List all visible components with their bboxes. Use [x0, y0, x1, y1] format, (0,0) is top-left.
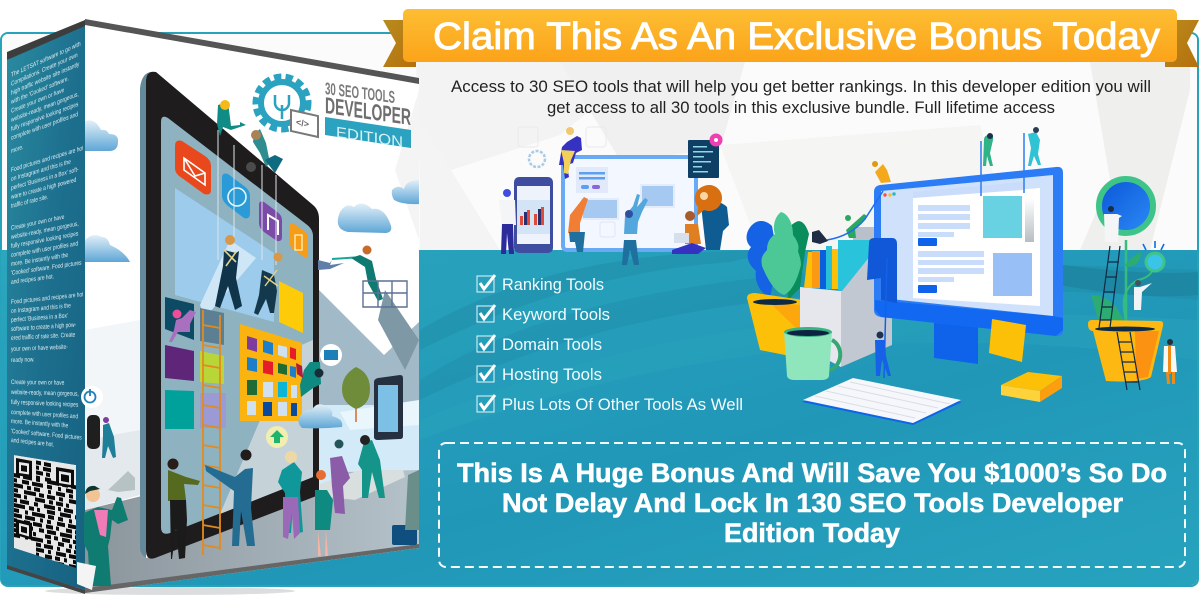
side panel small copy: ware to create a high powered	[10, 177, 76, 201]
product box: logo: </>	[296, 117, 309, 129]
figure: man in blue suit	[205, 450, 255, 546]
tablet app icons	[175, 141, 308, 258]
side panel small copy: perfect 'Business in a Box' soft-	[11, 167, 79, 192]
illustration: figure with pole	[875, 258, 891, 378]
illustration: monitor climbers	[812, 127, 1041, 244]
item: ranking tools: Ranking Tools	[502, 275, 604, 294]
illustration: flower ladders and scientists	[1099, 206, 1177, 390]
side panel small copy: on Instagram and this is the	[11, 159, 71, 183]
figure: man in green reaching ladder	[168, 458, 200, 559]
product box: logo: DEVELOPER	[325, 92, 411, 130]
product box: logo: 30 SEO TOOLS	[325, 79, 395, 107]
bookshelf	[240, 324, 302, 421]
side panel small copy: complete with user profiles and	[11, 241, 78, 259]
item: other tools: Plus Lots Of Other Tools As Well	[502, 395, 743, 414]
side panel small copy: Food pictures and recipes are hot	[11, 145, 84, 174]
speech bubble: book	[320, 344, 342, 366]
figure: woman with telescope on platform	[318, 246, 407, 307]
illustration: right potted flower	[1088, 179, 1164, 382]
tree	[342, 367, 370, 422]
side panel small copy: ered traffic of rate site. Create	[11, 332, 75, 342]
side panel small copy: website-ready, mean gorgeous,	[10, 389, 79, 398]
side panel small copy: with the 'Cooked' software.	[10, 76, 69, 107]
speech bubble: power	[81, 386, 103, 408]
speech bubble: up arrow	[266, 426, 288, 448]
product box: logo: EDITION	[336, 124, 403, 151]
illustration: web team with phone and board	[499, 127, 729, 265]
intro text: Access to 30 SEO tools that will help you get better rankings. In this developer edition you will	[451, 78, 1151, 96]
callout: dashed bonus box	[439, 443, 1185, 567]
climbers on tablet	[169, 100, 283, 342]
title banner: Claim This As An Exclusive Bonus Today	[433, 16, 1160, 58]
small tablet	[374, 375, 403, 440]
illustration: left potted plant	[747, 212, 809, 355]
qr code	[14, 455, 76, 568]
figure: woman on cloud with book	[296, 362, 324, 397]
side panel small copy: high traffic website site instantly	[11, 61, 79, 97]
item: domain tools: Domain Tools	[502, 335, 602, 354]
side panel small copy: software to create a high pow-	[11, 322, 76, 333]
side panel small copy: Food pictures and recipes are hot	[11, 292, 84, 306]
side panel small copy: more.	[11, 144, 24, 155]
tablet	[140, 72, 319, 559]
side panel small copy: perfect 'Business in a Box'	[11, 313, 68, 324]
side panel small copy: and recipes are hot.	[11, 437, 54, 449]
side panel small copy: your own or have website-	[11, 344, 68, 353]
item: keyword tools: Keyword Tools	[502, 305, 610, 324]
illustration: yellow block	[1001, 372, 1062, 402]
side panel small copy: complete with user profiles and	[11, 111, 78, 142]
illustration: desktop monitor	[867, 167, 1063, 364]
product box: front face	[85, 19, 419, 593]
ribbon tail right	[1165, 20, 1199, 67]
intro text	[451, 78, 1151, 117]
callout: dashed bonus box: Edition Today	[724, 518, 900, 548]
callout: dashed bonus box: This Is A Huge Bonus And Will Save You $1000’s So Do	[457, 458, 1167, 488]
product box shadow	[45, 587, 295, 595]
callout: dashed bonus box: Not Delay And Lock In 130 SEO Tools Developer	[502, 488, 1123, 518]
figure: person with power block	[87, 415, 116, 458]
side panel small copy: 'Cooked' software. Food pictures	[11, 260, 82, 277]
side panel small copy: fully responsive looking recipes	[11, 231, 78, 250]
clouds	[85, 120, 419, 428]
side panel small copy: Compilations. Create your own	[11, 52, 78, 88]
ribbon tail left	[383, 20, 416, 67]
illustration: file holder with books	[800, 227, 892, 367]
side panel small copy: traffic of rate site.	[11, 194, 49, 210]
ladder	[203, 310, 220, 555]
illustration: sticky note	[989, 319, 1026, 362]
side panel small copy	[10, 41, 84, 449]
product box: logo	[257, 78, 411, 151]
figure: woman on phone	[278, 451, 303, 539]
illustration: keyboard	[802, 378, 962, 425]
checklist	[477, 275, 743, 414]
side panel small copy: Create your own or have	[11, 214, 64, 232]
side panel small copy: 'Cooked' software. Food pictures	[11, 428, 82, 442]
illustration: green mug	[784, 327, 840, 380]
side panel small copy: on Instagram and this is the	[11, 303, 71, 315]
figure: team at drafting table	[315, 435, 419, 556]
side panel small copy: The LETSAT software to go with	[11, 41, 81, 79]
item: hosting tools: Hosting Tools	[502, 365, 602, 384]
side panel small copy: fully responsive looking recipes	[11, 101, 78, 133]
side panel small copy: Create your own or have	[11, 87, 65, 115]
side panel small copy: ready now.	[11, 357, 35, 364]
intro text: get access to all 30 tools in this exclusive bundle. Full lifetime access	[547, 99, 1055, 117]
product box: side face	[7, 20, 85, 594]
side panel small copy: website-ready, mean gorgeous,	[10, 91, 79, 125]
figure: megaphone woman	[77, 471, 135, 590]
side panel small copy: fully responsive looking recipes	[11, 399, 78, 409]
side panel small copy: more. Be instantly with the	[11, 418, 68, 430]
side panel small copy: complete with user profiles and	[11, 409, 78, 421]
tablet tiles	[165, 281, 303, 429]
side panel small copy: Create your own or have	[11, 379, 64, 387]
side panel small copy: more. Be instantly with the	[11, 252, 68, 268]
side panel small copy: website-ready, mean gorgeous,	[10, 221, 79, 241]
side panel small copy: and recipes are hot.	[11, 274, 54, 286]
